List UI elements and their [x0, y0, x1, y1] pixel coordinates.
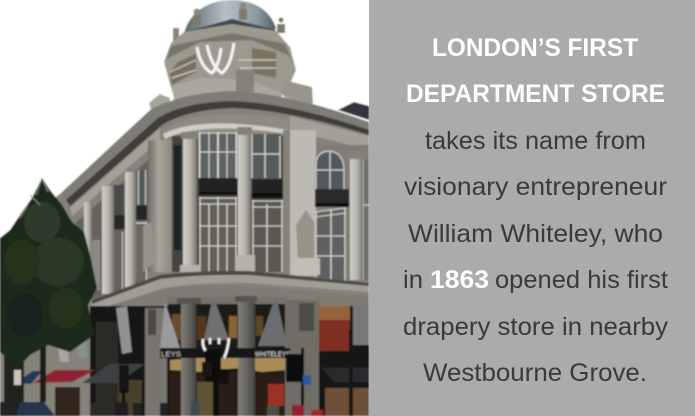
body text — [403, 127, 669, 387]
gold garland — [170, 358, 287, 372]
heading — [406, 34, 665, 108]
photo: Whiteleys building — [0, 0, 369, 416]
W logo — [197, 43, 234, 73]
body text: visionary entrepreneur — [404, 173, 667, 201]
body text: opened his first — [495, 266, 668, 294]
body text: drapery store in nearby — [403, 313, 669, 341]
body text: in — [403, 266, 423, 294]
heading: DEPARTMENT STORE — [406, 80, 665, 108]
awnings — [4, 345, 369, 416]
main building mass — [0, 93, 369, 416]
lower piers — [96, 296, 319, 416]
upper columns — [84, 127, 365, 294]
lit windows — [55, 306, 369, 416]
upper floor wall — [76, 160, 148, 300]
tree — [0, 178, 97, 402]
street level — [0, 330, 353, 416]
ground floor entablature — [90, 272, 369, 312]
statues — [143, 210, 320, 275]
WHITELEYS sign — [160, 348, 290, 358]
upper windows — [92, 132, 369, 292]
body text: Westbourne Grove. — [423, 359, 647, 387]
body text: William Whiteley, who — [408, 220, 663, 248]
christmas decorations — [8, 295, 369, 365]
WHITELEYS sign: LEYS — [161, 352, 181, 358]
text panel — [369, 0, 695, 416]
main cornice — [62, 91, 369, 200]
shop interior — [90, 306, 369, 416]
dome — [173, 0, 285, 42]
drum tower — [149, 24, 313, 113]
frieze bow — [162, 114, 290, 134]
slate roof — [338, 102, 369, 120]
light arc — [203, 338, 229, 358]
heading: LONDON’S FIRST — [432, 34, 638, 62]
body text: takes its name from — [425, 127, 646, 155]
WHITELEYS sign: WHITELEYS — [255, 352, 290, 358]
year highlight: 1863 — [430, 266, 489, 294]
